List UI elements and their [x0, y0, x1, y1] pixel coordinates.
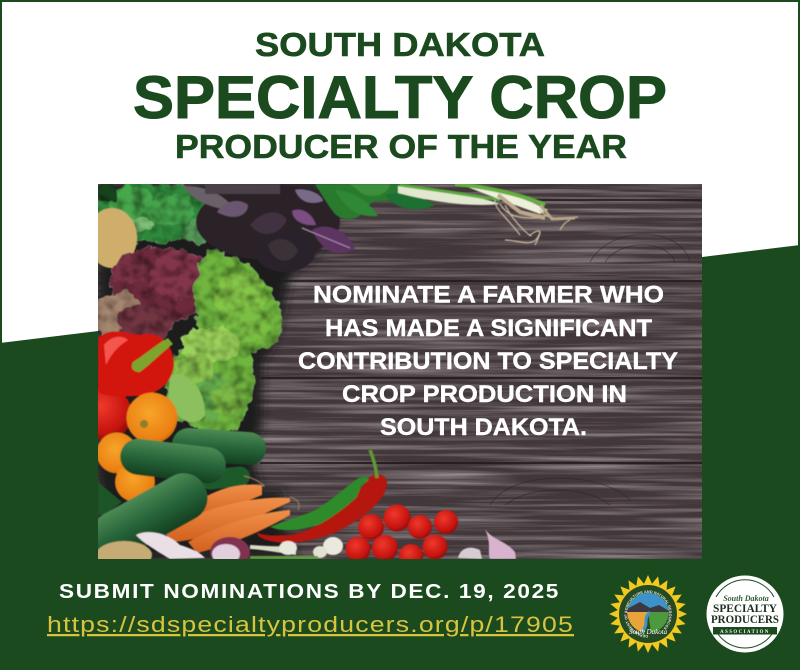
carrots: [162, 476, 299, 553]
green herb bunch: [98, 184, 207, 247]
seal signature: South Dakota: [629, 628, 668, 636]
badge name: Producers: PRODUCERS: [711, 612, 779, 626]
message line 1: NOMINATE A FARMER WHO: [313, 282, 664, 308]
logo: South Dakota Department of Agriculture seal: [609, 575, 687, 653]
seal disc: [619, 585, 677, 643]
chili peppers: [257, 450, 387, 543]
dark green leaf bottom left: [98, 482, 122, 515]
seal landscape: [625, 593, 671, 632]
potato: [98, 207, 138, 269]
green leaves at top: [315, 184, 435, 219]
red bell pepper: [98, 331, 174, 396]
badge disc: [706, 576, 784, 652]
badge banner text: ASSOCIATION: [720, 630, 770, 635]
message line 5: SOUTH DAKOTA.: [380, 414, 587, 441]
potato and red onion bottom: [98, 531, 250, 559]
dark underlay between vegetables: [98, 184, 329, 559]
title line: Specialty Crop: SPECIALTY CROP: [133, 64, 667, 131]
wood table background: [98, 184, 702, 559]
badge ring arcs: [716, 580, 774, 648]
message line 2: HAS MADE A SIGNIFICANT: [325, 315, 652, 342]
nomination message: [298, 282, 678, 441]
logo: South Dakota Specialty Producers Association: [706, 576, 784, 652]
title line: Producer of the Year: PRODUCER OF THE YEAR: [175, 129, 627, 166]
seal curved lettering: DEPARTMENT OF AGRICULTURE AND NATURAL RESOURCES: [624, 590, 672, 638]
photo panel: vegetables on dark wood: [80, 182, 702, 569]
red tomato: [98, 389, 131, 440]
title line: South Dakota: SOUTH DAKOTA: [255, 27, 545, 64]
green lettuce: [165, 250, 282, 431]
spring onions: [398, 184, 578, 245]
nomination link: https://sdspecialtyproducers.org/p/17905: [47, 612, 574, 637]
sun rays: [609, 575, 687, 653]
purple basil: [182, 184, 355, 272]
message line 3: CONTRIBUTION TO SPECIALTY: [298, 348, 678, 375]
badge banner: [713, 627, 777, 634]
background: green diagonal lower area: [0, 245, 800, 670]
badge name: Specialty: SPECIALTY: [713, 601, 777, 615]
herbs and leaves: [80, 182, 578, 569]
nomination deadline: SUBMIT NOMINATIONS BY DEC. 19, 2025: [59, 580, 560, 603]
badge script line: South Dakota: [723, 594, 769, 603]
red leaf lettuce: [92, 247, 210, 340]
orange tomatoes: [96, 392, 178, 502]
message line 4: CROP PRODUCTION IN: [342, 381, 627, 408]
cucumbers: [118, 427, 267, 491]
garlic cloves: [458, 529, 516, 559]
green lettuce highlight: [168, 374, 205, 422]
zucchini: [98, 472, 208, 550]
cherry tomatoes: [344, 504, 458, 559]
title: [133, 27, 667, 166]
spring onion bulbs: [250, 537, 343, 559]
